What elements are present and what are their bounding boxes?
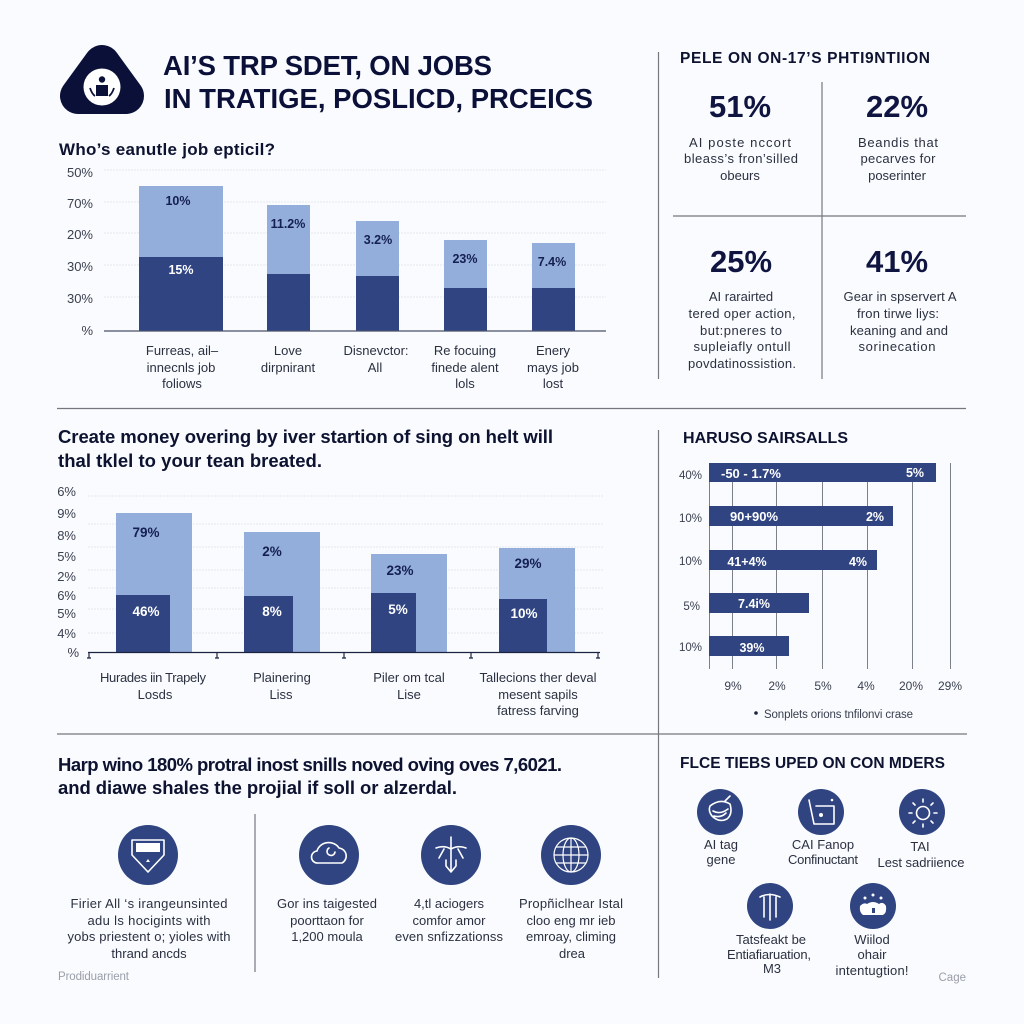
panel: horizontal bars: 90+90% <box>730 509 778 524</box>
panel: horizontal bars: 9% <box>724 679 742 693</box>
panel: horizontal bars: 4% <box>849 555 867 569</box>
heading: chart two <box>58 426 553 471</box>
item: badge shield <box>68 825 230 961</box>
stacked bar chart: top left: 10% <box>165 194 191 208</box>
overlapping bar chart: middle left: 79% <box>132 525 160 540</box>
panel: horizontal bars: 4% <box>857 679 875 693</box>
overlapping bar chart: middle left: 2% <box>57 569 76 584</box>
panel: horizontal bars: 5% <box>814 679 832 693</box>
overlapping bar chart: middle left: Losds <box>138 687 173 702</box>
icon: cloud hands <box>836 883 908 978</box>
panel: horizontal bars: 10% <box>679 513 702 525</box>
title: IN TRATIGE, POSLICD, PRCEICS <box>164 83 593 114</box>
panel heading: FLCE TIEBS UPED ON CON MDERS <box>680 755 945 772</box>
icon: basket <box>788 789 858 867</box>
heading: chart two: thal tklel to your tean breated. <box>58 450 322 471</box>
panel: key percentages <box>673 50 966 379</box>
icon: cloud hands: ohair <box>858 947 887 962</box>
overlapping bar chart: middle left: 5% <box>57 549 76 564</box>
stacked bar chart: top left: 11.2% <box>271 217 305 231</box>
overlapping bar chart: middle left: Hurades iin Trapely <box>100 670 206 685</box>
panel: horizontal bars <box>679 430 962 721</box>
icon: pillars: Tatsfeakt be <box>736 932 806 947</box>
panel: key percentages: Beandis that <box>858 135 938 150</box>
icon: brain <box>697 789 743 867</box>
footer right: Cage <box>938 972 966 984</box>
item: globe: drea <box>559 946 586 961</box>
heading: who's job chart: Who’s eanutle job epticil? <box>59 140 275 159</box>
item: arrows <box>395 825 504 944</box>
stacked bar chart: top left: All <box>368 360 382 375</box>
panel: horizontal bars: 5% <box>683 601 700 613</box>
icon: pillars: Entiafiaruation, <box>727 947 811 962</box>
icon: pillars <box>727 883 811 976</box>
panel: horizontal bars: Sonplets orions tnfilonvi crase <box>764 709 913 721</box>
overlapping bar chart: middle left: mesent sapils <box>498 687 578 702</box>
stacked bar chart: top left: 3.2% <box>364 233 392 247</box>
overlapping bar chart: middle left: 2% <box>262 544 282 559</box>
panel: key percentages: 22% <box>866 89 928 124</box>
panel: key percentages: supleiafly ontull <box>694 339 791 354</box>
panel: key percentages: obeurs <box>720 168 760 183</box>
footer left: Prodiduarrient <box>58 971 130 983</box>
icon: sun <box>878 789 964 870</box>
item: arrows: 4,tl aciogers <box>414 896 485 911</box>
overlapping bar chart: middle left: % <box>67 645 79 660</box>
panel: key percentages: poserinter <box>868 168 927 183</box>
heading: skills section: and diawe shales the projial if soll or alzerdal. <box>58 777 457 798</box>
stacked bar chart: top left: 15% <box>168 263 194 277</box>
stacked bar chart: top left: 23% <box>452 252 478 266</box>
overlapping bar chart: middle left: 5% <box>57 606 76 621</box>
item: cloud: poorttaon for <box>290 913 365 928</box>
panel: horizontal bars: 40% <box>679 470 702 482</box>
stacked bar chart: top left: mays job <box>527 360 579 375</box>
stacked bar chart: top left: finede alent <box>431 360 499 375</box>
item: cloud: Gor ins taigested <box>277 896 377 911</box>
item: arrows: even snfizzationss <box>395 929 504 944</box>
overlapping bar chart: middle left: 8% <box>57 528 76 543</box>
panel: icons <box>680 755 964 978</box>
item: badge shield: yobs priestent o; yioles with <box>68 929 230 944</box>
title <box>163 50 593 114</box>
overlapping bar chart: middle left: 5% <box>388 602 408 617</box>
panel: key percentages: fron tirwe liys: <box>857 306 939 321</box>
heading: chart two: Create money overing by iver startion of sing on helt will <box>58 426 553 447</box>
logo icon <box>78 63 126 106</box>
stacked bar chart: top left: Furreas, ail– <box>146 343 219 358</box>
overlapping bar chart: middle left: 29% <box>514 556 542 571</box>
item: badge shield: Firier All ‘s irangeunsinted <box>70 896 228 911</box>
panel: key percentages: 41% <box>866 244 928 279</box>
overlapping bar chart: middle left: 6% <box>57 484 76 499</box>
panel: horizontal bars: 10% <box>679 556 702 568</box>
stacked bar chart: top left: 30% <box>67 291 93 306</box>
panel: key percentages: 51% <box>709 89 771 124</box>
panel: horizontal bars: 7.4i% <box>738 597 770 611</box>
overlapping bar chart: middle left: 23% <box>386 563 414 578</box>
overlapping bar chart: middle left: Tallecions ther deval <box>480 670 597 685</box>
stacked bar chart: top left: Disnevctor: <box>343 343 409 358</box>
item: globe: Propñiclhear Istal <box>519 896 623 911</box>
stacked bar chart: top left: foliows <box>162 376 202 391</box>
stacked bar chart: top left: % <box>81 323 93 338</box>
panel: key percentages: Gear in spservert A <box>844 289 957 304</box>
stacked bar chart: top left: 70% <box>67 196 93 211</box>
overlapping bar chart: middle left: 6% <box>57 588 76 603</box>
panel: key percentages: keaning and and <box>850 323 948 338</box>
item: globe: cloo eng mr ieb <box>527 913 615 928</box>
stacked bar chart: top left: dirpnirant <box>261 360 315 375</box>
panel: horizontal bars: -50 - 1.7% <box>721 466 781 481</box>
stacked bar chart: top left: 20% <box>67 227 93 242</box>
panel: key percentages: povdatinossistion. <box>688 356 796 371</box>
panel: key percentages: tered oper action, <box>688 306 796 321</box>
panel: horizontal bars: 20% <box>899 679 923 693</box>
overlapping bar chart: middle left: Liss <box>269 687 293 702</box>
stacked bar chart: top left: Re focuing <box>434 343 496 358</box>
stacked bar chart: top left: 50% <box>67 165 93 180</box>
heading: skills section: Harp wino 180% protral inost snills noved oving oves 7,6021. <box>58 754 562 775</box>
overlapping bar chart: middle left: 46% <box>132 604 160 619</box>
stacked bar chart: top left: innecnls job <box>147 360 215 375</box>
stacked bar chart: top left: 7.4% <box>538 255 566 269</box>
item: badge shield: adu ls hocigints with <box>88 913 210 928</box>
icon: basket: Confinuctant <box>788 852 858 867</box>
panel: key percentages: AI poste nccort <box>689 135 791 150</box>
icon: brain: gene <box>707 852 735 867</box>
panel: horizontal bars: 2% <box>866 510 884 524</box>
icon: pillars: M3 <box>763 961 781 976</box>
overlapping bar chart: middle left: 9% <box>57 506 76 521</box>
overlapping bar chart: middle left: Plainering <box>253 670 311 685</box>
panel heading: PELE ON ON-17’S PHTI9NTIION <box>680 50 930 67</box>
overlapping bar chart: middle left: Lise <box>397 687 421 702</box>
stacked bar chart: top left: lost <box>543 376 564 391</box>
overlapping bar chart: middle left: 10% <box>510 606 538 621</box>
heading: skills section <box>58 754 562 798</box>
panel: horizontal bars: 29% <box>938 679 962 693</box>
icon: brain: AI tag <box>704 837 738 852</box>
panel: key percentages: sorinecation <box>858 339 936 354</box>
item: cloud: 1,200 moula <box>291 929 364 944</box>
stacked bar chart: top left: lols <box>455 376 475 391</box>
panel: horizontal bars: 41+4% <box>727 555 767 569</box>
overlapping bar chart: middle left: 8% <box>262 604 282 619</box>
panel: horizontal bars: 39% <box>739 641 765 655</box>
item: globe: emroay, climing <box>526 929 616 944</box>
overlapping bar chart: middle left: 4% <box>57 626 76 641</box>
panel: horizontal bars: 5% <box>906 466 924 480</box>
panel: horizontal bars: 2% <box>768 679 786 693</box>
icon: cloud hands: Wiilod <box>854 932 890 947</box>
icon: sun: Lest sadriience <box>878 855 964 870</box>
stacked bar chart: top left: 30% <box>67 259 93 274</box>
panel: key percentages: bleass’s fron’silled <box>684 151 798 166</box>
panel: key percentages: pecarves for <box>860 151 936 166</box>
panel: key percentages: AI rarairted <box>709 289 773 304</box>
item: arrows: comfor amor <box>413 913 486 928</box>
icon: cloud hands: intentugtion! <box>836 963 908 978</box>
title: AI’S TRP SDET, ON JOBS <box>163 50 492 81</box>
icon: basket: CAI Fanop <box>792 837 854 852</box>
stacked bar chart: top left <box>67 165 606 391</box>
stacked bar chart: top left: Love <box>274 343 302 358</box>
overlapping bar chart: middle left <box>57 484 604 718</box>
item: cloud <box>277 825 377 944</box>
icon: sun: TAI <box>910 839 930 854</box>
overlapping bar chart: middle left: fatress farving <box>497 703 579 718</box>
overlapping bar chart: middle left: Piler om tcal <box>373 670 445 685</box>
item: badge shield: thrand ancds <box>111 946 187 961</box>
item: globe <box>519 825 623 961</box>
stacked bar chart: top left: Enery <box>536 343 570 358</box>
panel: horizontal bars: 10% <box>679 642 702 654</box>
panel: key percentages: but:pneres to <box>700 323 782 338</box>
panel heading: HARUSO SAIRSALLS <box>683 430 848 447</box>
panel: key percentages: 25% <box>710 244 772 279</box>
